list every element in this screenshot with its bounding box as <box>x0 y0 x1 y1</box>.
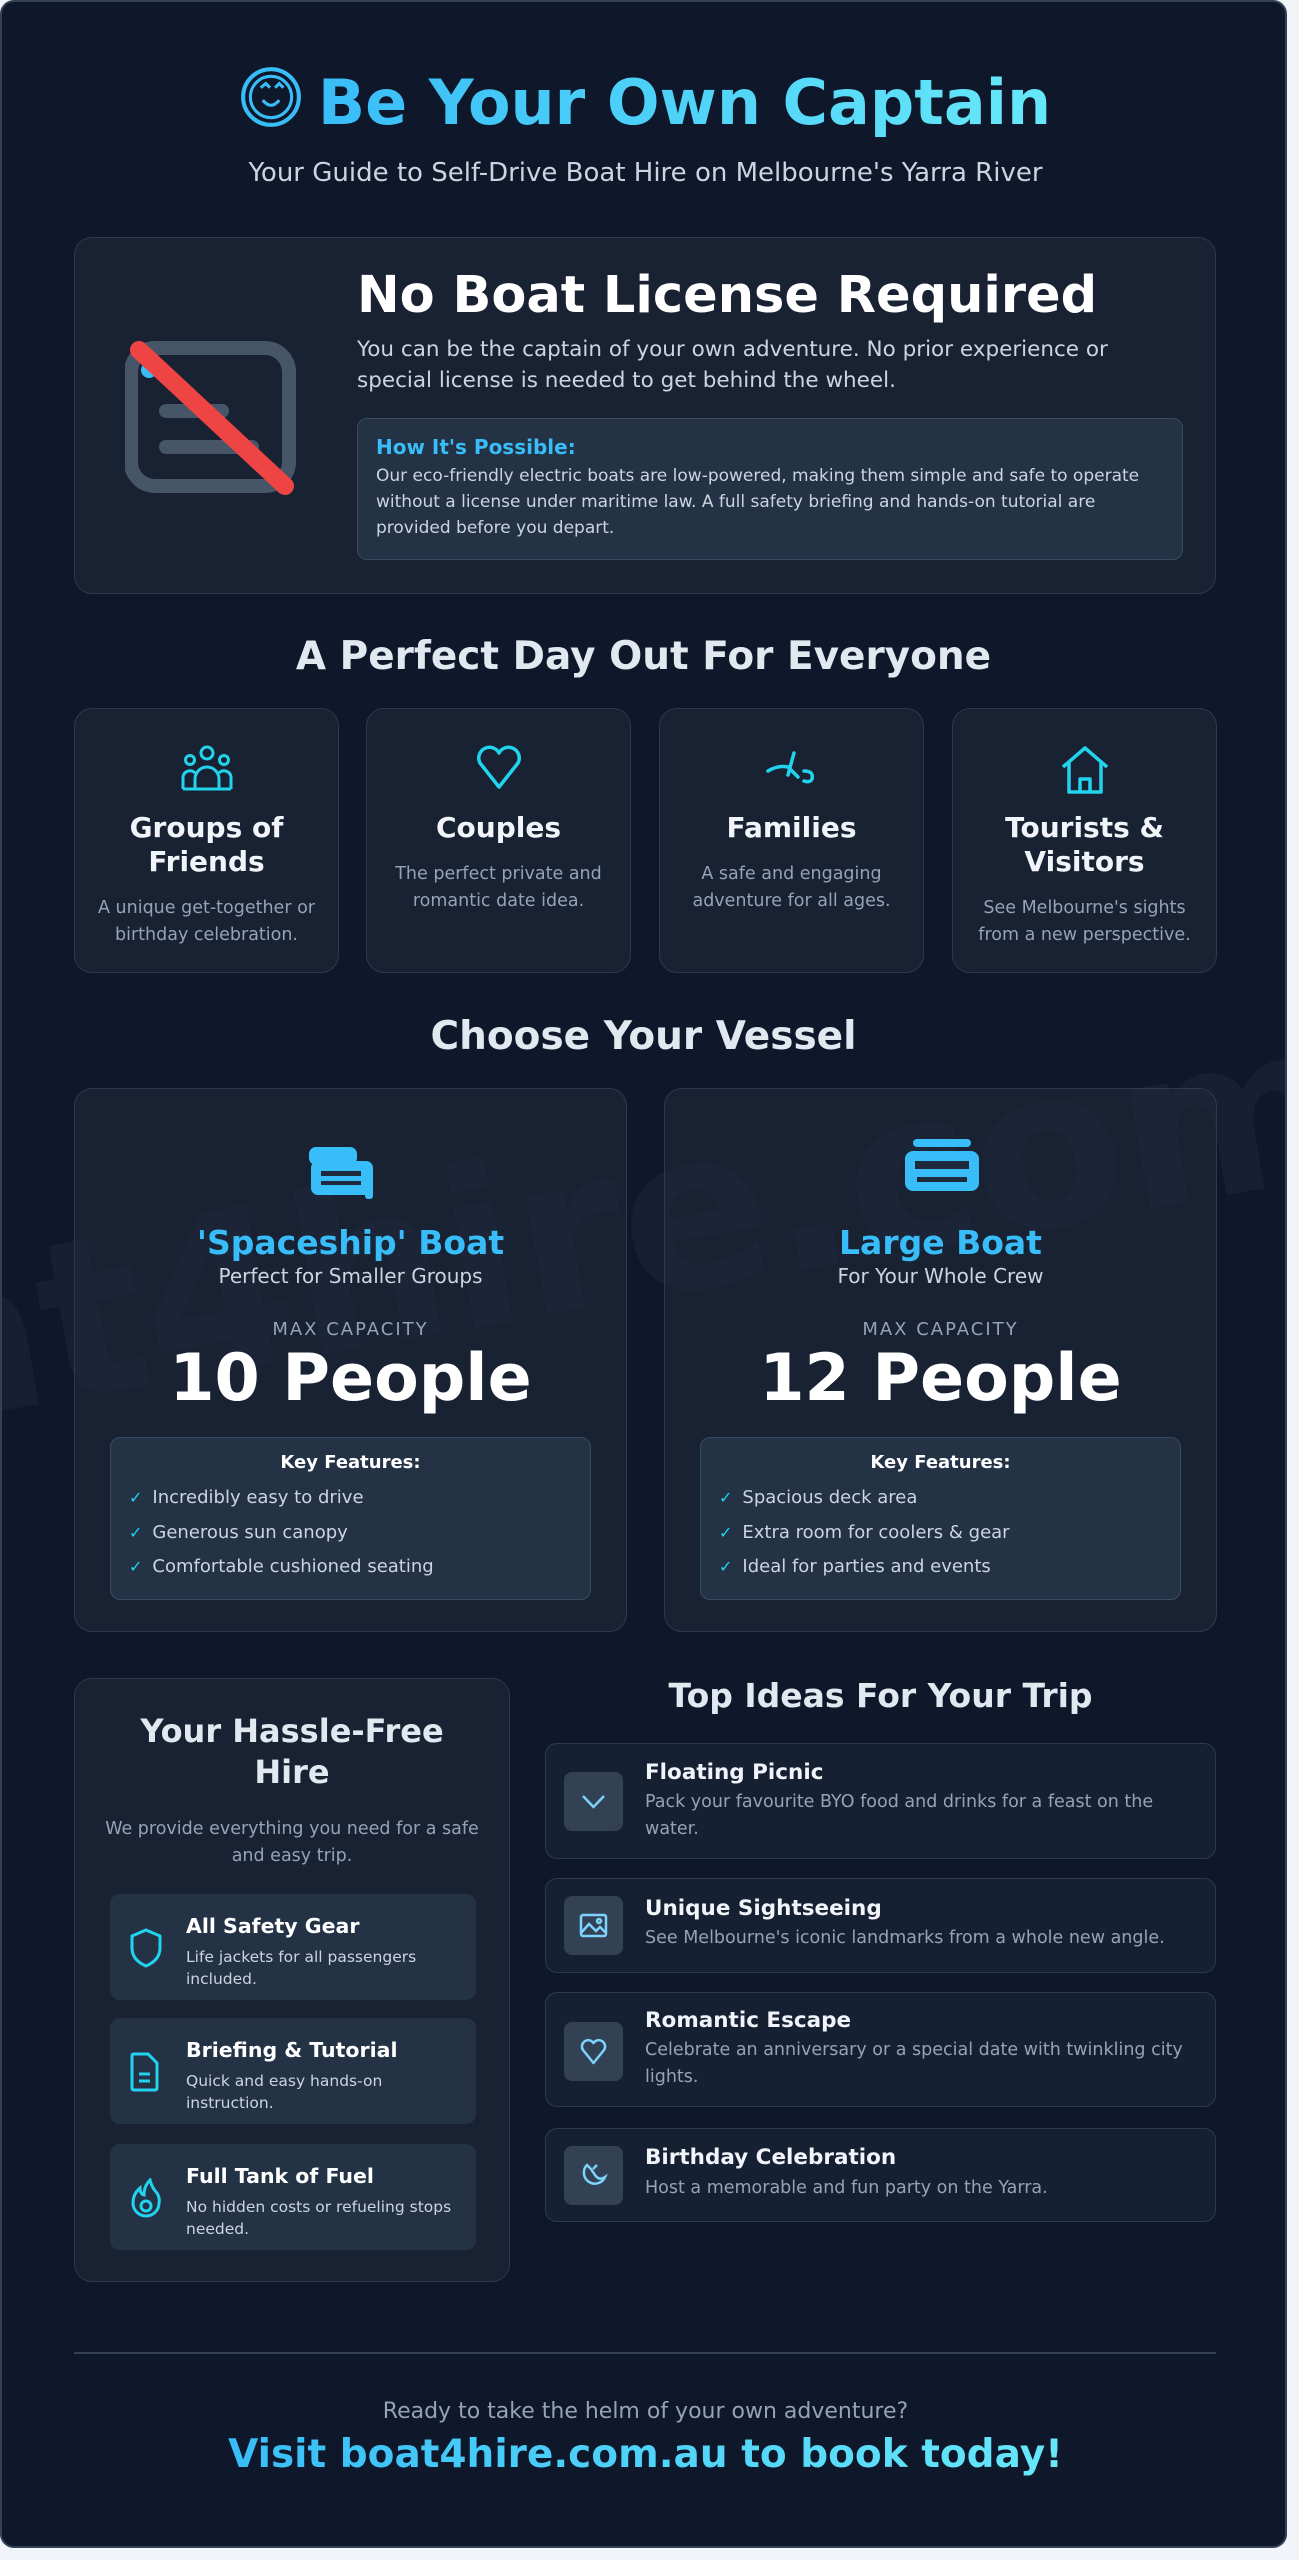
features box <box>700 1437 1181 1600</box>
icon: heart <box>477 746 521 789</box>
heading <box>140 1712 444 1791</box>
idea: picnic: Pack your favourite BYO food and drinks for a feast on the water. <box>645 1792 1153 1839</box>
panel: friends: Groups of Friends <box>130 811 283 878</box>
item: safety gear <box>110 1894 476 2000</box>
heading: perfect day: A Perfect Day Out For Everyone <box>296 634 991 679</box>
item: briefing: Quick and easy hands-on instruction. <box>186 2072 382 2112</box>
idea: romantic <box>545 1992 1216 2107</box>
item: fuel: Full Tank of Fuel <box>186 2164 374 2188</box>
panel: spaceship boat <box>74 1088 627 1632</box>
features box: ✓ Extra room for coolers & gear <box>719 1522 1010 1542</box>
panel: no license <box>74 237 1216 594</box>
item: fuel: No hidden costs or refueling stops needed. <box>186 2198 451 2238</box>
features box <box>110 1437 591 1600</box>
icon: families <box>766 751 814 784</box>
features box: ✓ Generous sun canopy <box>129 1522 348 1542</box>
features box: Key Features: <box>870 1452 1011 1473</box>
panel: couples: The perfect private and romantic date idea. <box>395 864 602 911</box>
panel: friends <box>74 708 339 973</box>
footer cta: Visit boat4hire.com.au to book today! <box>228 2432 1063 2477</box>
item: fuel <box>110 2144 476 2250</box>
panel: hassle-free <box>74 1678 510 2282</box>
panel: tourists <box>952 708 1217 973</box>
panel: large boat: For Your Whole Crew <box>838 1264 1043 1288</box>
panel: spaceship boat: Perfect for Smaller Groups <box>218 1264 482 1288</box>
icon: large boat <box>905 1139 979 1191</box>
features box: ✓ Incredibly easy to drive <box>129 1487 364 1508</box>
panel: spaceship boat: 10 People <box>169 1341 532 1416</box>
callout: how: How It's Possible: <box>376 435 576 459</box>
features box: ✓ Spacious deck area <box>719 1487 917 1508</box>
heading: top ideas: Top Ideas For Your Trip <box>668 1676 1093 1715</box>
panel: large boat: MAX CAPACITY <box>862 1319 1019 1340</box>
item: safety gear: All Safety Gear <box>186 1914 359 1938</box>
heading: Your Hassle-Free <box>140 1712 444 1750</box>
panel: families <box>659 708 924 973</box>
icon: group <box>182 746 232 790</box>
features box: Key Features: <box>280 1452 421 1473</box>
item: briefing: Briefing & Tutorial <box>186 2038 398 2062</box>
callout: how: Our eco-friendly electric boats are low-powered, making them simple and safe to operate without a license under maritime law. A full safety briefing and hands-on tutorial are provided before you depart. <box>376 466 1139 538</box>
idea: sightseeing: See Melbourne's iconic landmarks from a whole new angle. <box>645 1928 1165 1948</box>
heading: No Boat License Required <box>357 266 1097 325</box>
icon: spaceship boat <box>309 1147 373 1199</box>
item: briefing <box>110 2018 476 2124</box>
idea: birthday: Host a memorable and fun party on the Yarra. <box>645 2178 1048 2198</box>
panel: families: Families <box>726 811 856 844</box>
icon: house <box>1062 746 1108 794</box>
panel: couples <box>366 708 631 973</box>
panel: families: A safe and engaging adventure for all ages. <box>692 864 891 911</box>
idea: picnic: Floating Picnic <box>645 1760 823 1785</box>
features box: ✓ Ideal for parties and events <box>719 1556 991 1577</box>
features box: ✓ Comfortable cushioned seating <box>129 1556 434 1577</box>
heading: choose vessel: Choose Your Vessel <box>430 1014 856 1059</box>
panel: large boat <box>664 1088 1217 1632</box>
idea: romantic: Romantic Escape <box>645 2008 851 2033</box>
title: Be Your Own Captain <box>318 66 1051 139</box>
panel: tourists: Tourists & Visitors <box>1005 811 1164 878</box>
idea: sightseeing <box>545 1878 1216 1973</box>
panel: friends: A unique get-together or birthday celebration. <box>98 898 315 945</box>
panel: spaceship boat: 'Spaceship' Boat <box>197 1223 504 1262</box>
footer text: Ready to take the helm of your own adventure? <box>383 2399 908 2424</box>
paragraph: You can be the captain of your own adventure. No prior experience or special license is needed to get behind the wheel. <box>357 337 1108 393</box>
idea: picnic <box>545 1743 1216 1859</box>
panel: couples: Couples <box>436 811 561 844</box>
panel: spaceship boat: MAX CAPACITY <box>272 1319 429 1340</box>
subtitle: Your Guide to Self-Drive Boat Hire on Melbourne's Yarra River <box>248 158 1043 188</box>
idea: birthday <box>545 2128 1216 2222</box>
heading: Hire <box>254 1753 330 1791</box>
idea: sightseeing: Unique Sightseeing <box>645 1896 882 1921</box>
callout: how <box>357 418 1183 560</box>
text: We provide everything you need for a safe and easy trip. <box>105 1819 479 1866</box>
item: safety gear: Life jackets for all passengers included. <box>186 1948 416 1988</box>
panel: large boat: 12 People <box>759 1341 1122 1416</box>
icon: captain <box>241 67 301 127</box>
panel: tourists: See Melbourne's sights from a new perspective. <box>978 898 1191 945</box>
icon: no license <box>125 341 296 495</box>
panel: large boat: Large Boat <box>839 1223 1042 1262</box>
idea: birthday: Birthday Celebration <box>645 2145 896 2170</box>
idea: romantic: Celebrate an anniversary or a special date with twinkling city lights. <box>645 2040 1183 2087</box>
